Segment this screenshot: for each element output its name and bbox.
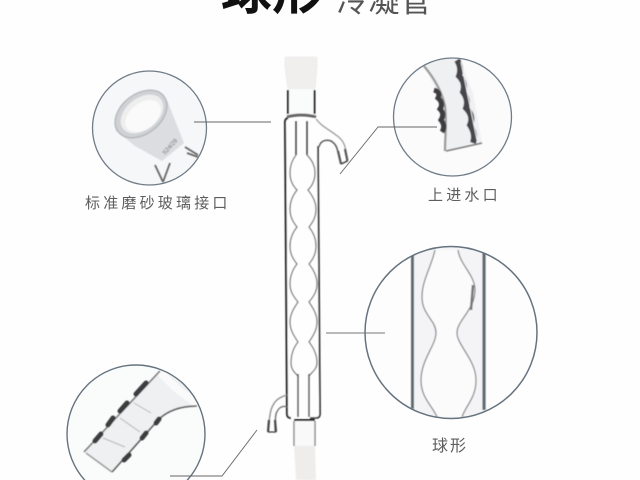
circle outline	[92, 71, 206, 185]
detail circle: lower water outlet	[67, 365, 205, 480]
outer jacket	[285, 118, 320, 418]
detail circle: upper water inlet	[394, 54, 512, 176]
title	[221, 0, 432, 20]
joint size marking: S24/29	[162, 138, 180, 156]
bulb close-up	[412, 245, 485, 420]
circle outline	[394, 58, 512, 176]
label: spherical bulb: 球形	[432, 437, 468, 455]
label: ground glass joint: 标准磨砂玻璃接口	[85, 195, 231, 212]
leader line: lower water outlet	[170, 430, 257, 476]
circle outline	[67, 365, 205, 480]
circle outline	[365, 246, 537, 418]
ribbed outlet tube close-up	[84, 371, 205, 472]
upper inner tube	[296, 121, 307, 155]
condenser apparatus	[268, 57, 348, 480]
leader line: spherical bulb	[326, 332, 385, 334]
lower water outlet arm	[268, 395, 288, 432]
spherical bulbs of inner tube	[290, 155, 317, 376]
lower neck	[293, 419, 316, 446]
detail circle: spherical bulb	[365, 245, 537, 420]
bottom ground glass joint	[294, 446, 316, 480]
upper neck	[287, 89, 316, 117]
leader line: ground joint	[194, 121, 271, 123]
leader line: upper water inlet	[340, 127, 437, 174]
label: upper water inlet: 上进水口	[428, 187, 501, 204]
upper water inlet arm	[316, 119, 348, 164]
top ground glass joint	[285, 57, 317, 89]
detail circle: ground glass joint	[92, 71, 206, 185]
lower inner tube	[298, 374, 309, 417]
ribbed inlet tube close-up	[422, 54, 482, 151]
